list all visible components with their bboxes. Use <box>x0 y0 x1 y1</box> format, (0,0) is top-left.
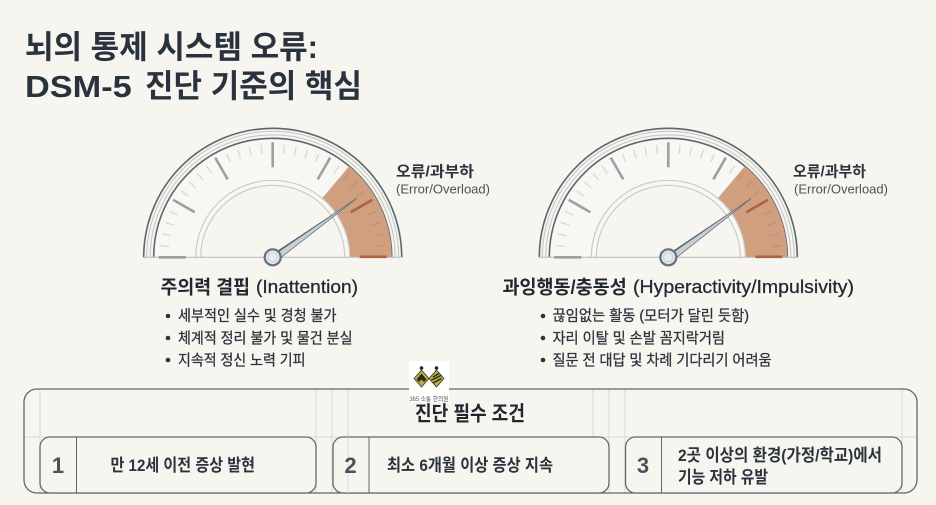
card 2 <box>333 437 609 493</box>
card 3: 2곳 이상의 환경(가정/학교)에서 <box>678 446 882 465</box>
callout: error overload left <box>396 164 490 196</box>
heading: hyperactivity: 과잉행동/충동성 <box>502 276 627 298</box>
heading: hyperactivity: (Hyperactivity/Impulsivity) <box>633 277 854 297</box>
callout: error overload left: (Error/Overload) <box>396 182 490 196</box>
card 1: 1 <box>52 453 64 478</box>
heading: inattention: 주의력 결핍 <box>160 276 250 298</box>
needle <box>660 198 751 265</box>
heading: hyperactivity <box>502 276 854 298</box>
title <box>25 29 362 104</box>
needle <box>265 198 357 265</box>
card 1 <box>40 437 316 493</box>
title: DSM-5 <box>25 69 132 104</box>
list: inattention symptoms: 지속적 정신 노력 기피 <box>178 352 306 369</box>
list: hyperactivity symptoms: 자리 이탈 및 손발 꼼지락거림 <box>552 330 725 347</box>
heading: inattention: (Inattention) <box>256 277 358 297</box>
list: inattention symptoms: 세부적인 실수 및 경청 불가 <box>178 308 337 324</box>
card 3: 기능 저하 유발 <box>678 468 768 487</box>
heading: inattention <box>160 276 358 298</box>
card 3 <box>626 437 902 493</box>
title: 뇌의 통제 시스템 오류: <box>25 29 318 65</box>
panel: diagnostic criteria <box>24 389 917 493</box>
section heading: 진단 필수 조건 <box>415 402 525 426</box>
card 3: 3 <box>637 453 649 478</box>
gauge: hyperactivity <box>539 128 797 265</box>
title: 진단 기준의 핵심 <box>145 68 362 104</box>
list: hyperactivity symptoms: 끊임없는 활동 (모터가 달린 듯함) <box>552 308 749 324</box>
list: inattention symptoms <box>166 308 352 369</box>
card 2: 최소 6개월 이상 증상 지속 <box>387 456 553 475</box>
list: hyperactivity symptoms <box>541 308 772 369</box>
gauge: inattention <box>144 128 402 265</box>
logo <box>409 361 449 403</box>
logo: 365 소통 한의원 <box>410 394 449 403</box>
list: hyperactivity symptoms: 질문 전 대답 및 차례 기다리기 어려움 <box>552 352 772 369</box>
callout: error overload right: (Error/Overload) <box>794 182 888 196</box>
callout: error overload left: 오류/과부하 <box>396 164 474 180</box>
list: inattention symptoms: 체계적 정리 불가 및 물건 분실 <box>178 330 352 347</box>
callout: error overload right: 오류/과부하 <box>793 164 866 180</box>
card 2: 2 <box>344 453 357 478</box>
card 1: 만 12세 이전 증상 발현 <box>110 456 255 475</box>
callout: error overload right <box>793 164 888 196</box>
